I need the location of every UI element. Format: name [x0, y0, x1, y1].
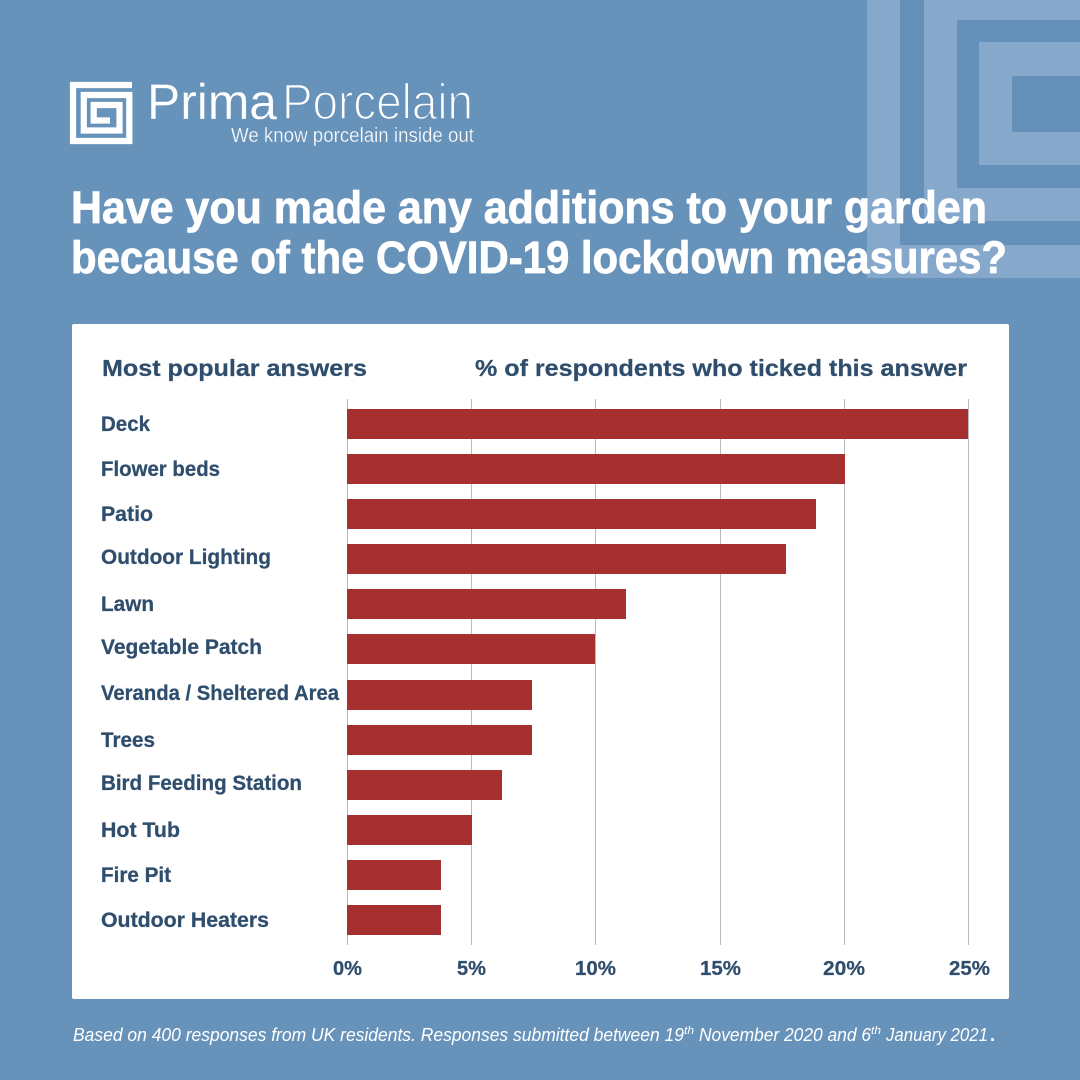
logo wordmark	[147, 74, 473, 130]
panel: chart card	[72, 324, 1009, 999]
category labels: Patio	[101, 503, 153, 526]
axis labels: 15%	[700, 957, 741, 980]
category labels: Bird Feeding Station	[101, 772, 302, 795]
category labels: Vegetable Patch	[101, 636, 262, 659]
axis labels: 0%	[333, 957, 362, 980]
category labels: Fire Pit	[101, 864, 171, 887]
title	[71, 182, 1007, 283]
footnote: November 2020 and 6	[699, 1025, 872, 1045]
icon: logo spiral	[73, 85, 132, 141]
title: because of the COVID-19 lockdown measures?	[71, 232, 1007, 283]
axis labels	[333, 957, 990, 980]
title: Have you made any additions to your garden	[71, 182, 987, 233]
logo wordmark: Porcelain	[282, 74, 473, 130]
footnote: th	[684, 1025, 694, 1037]
footnote: Based on 400 responses from UK residents. Responses submitted between 19	[73, 1025, 684, 1045]
category labels: Deck	[101, 413, 150, 436]
category labels: Outdoor Lighting	[101, 546, 271, 569]
footnote	[73, 1025, 995, 1045]
bars	[347, 409, 968, 935]
axis labels: 10%	[575, 957, 616, 980]
axis labels: 20%	[823, 957, 865, 980]
logo	[73, 74, 474, 147]
footnote: January 2021	[885, 1025, 988, 1045]
category labels: Veranda / Sheltered Area	[101, 682, 339, 705]
logo tagline: We know porcelain inside out	[231, 125, 474, 147]
logo wordmark: Prima	[147, 74, 277, 130]
category labels	[101, 413, 339, 932]
category labels: Lawn	[101, 593, 154, 616]
category labels: Outdoor Heaters	[101, 909, 269, 932]
footnote: th	[871, 1025, 881, 1037]
footnote: .	[990, 1025, 995, 1045]
heading: answers column: Most popular answers	[102, 355, 367, 381]
axis labels: 25%	[949, 957, 990, 980]
category labels: Hot Tub	[101, 819, 180, 842]
axis labels: 5%	[457, 957, 486, 980]
decorative background spiral	[867, 0, 1080, 278]
heading: percentage axis: % of respondents who ticked this answer	[475, 355, 967, 381]
bar chart	[101, 399, 990, 980]
category labels: Trees	[101, 729, 155, 752]
category labels: Flower beds	[101, 458, 220, 481]
